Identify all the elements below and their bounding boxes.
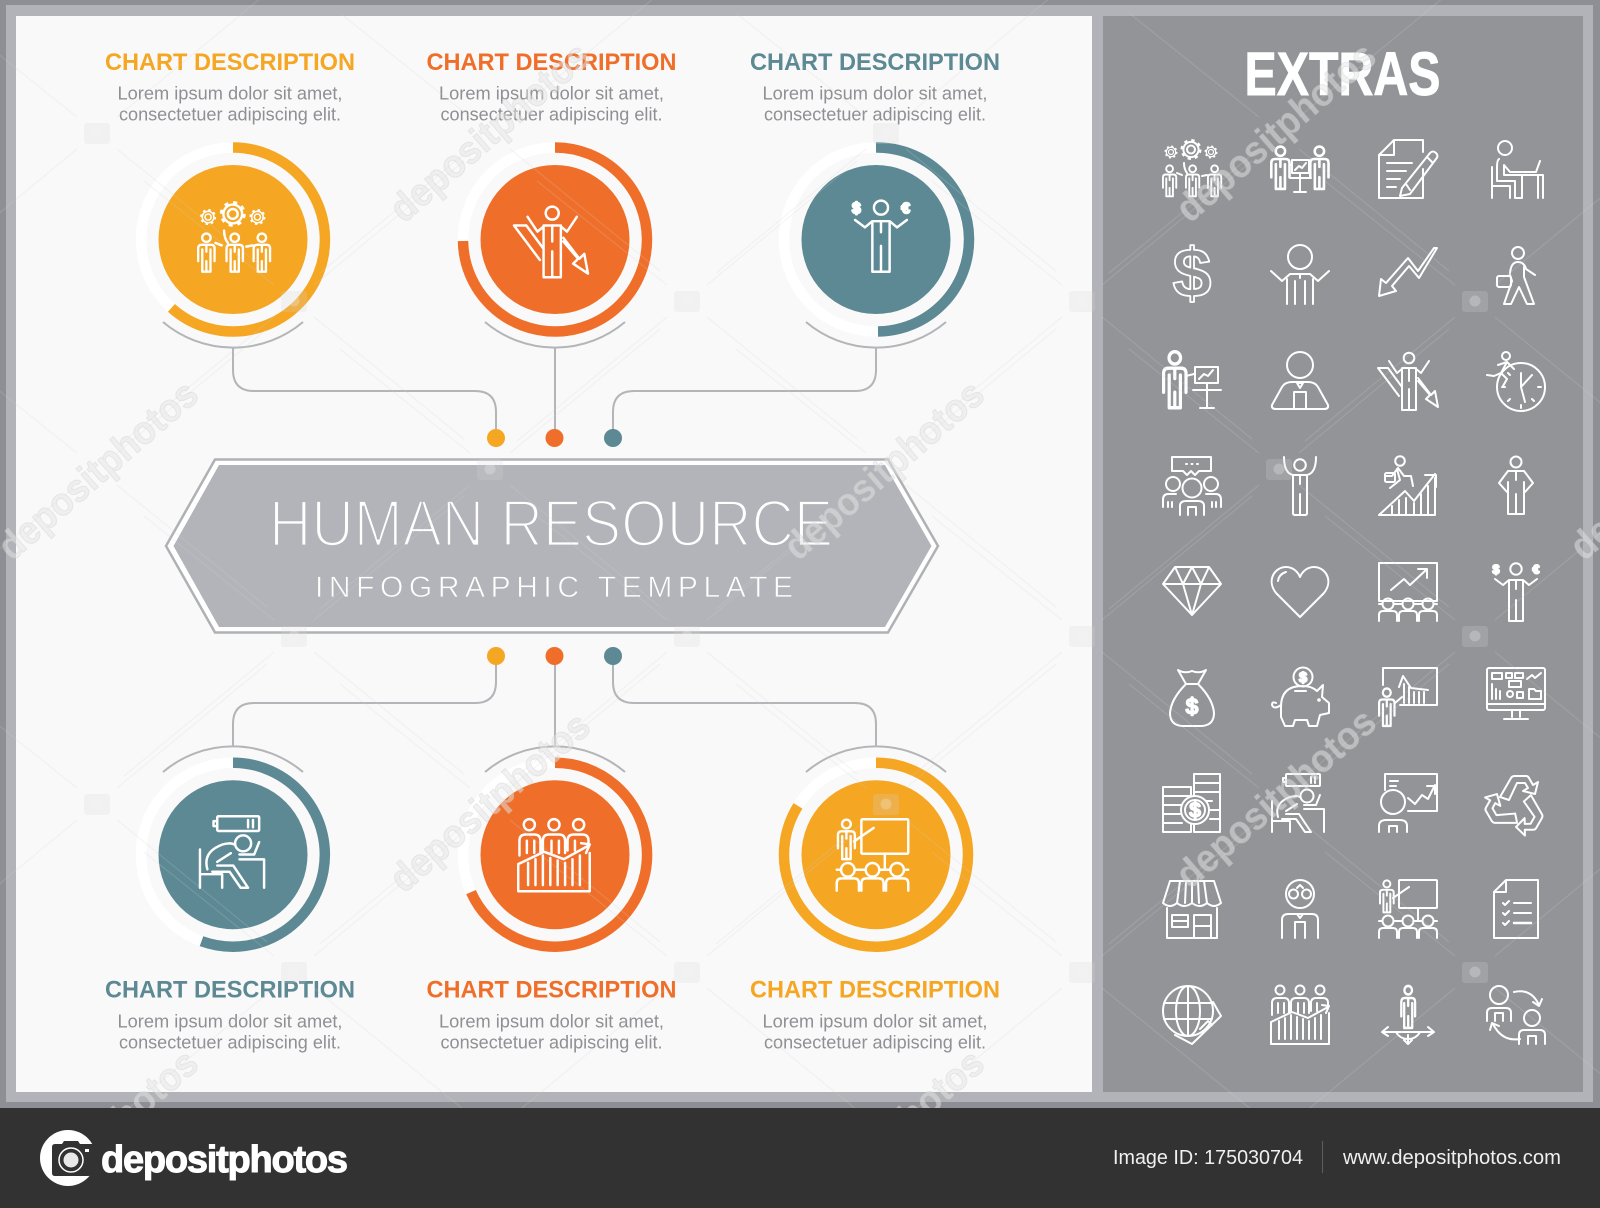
subtitle: INFOGRAPHIC TEMPLATE bbox=[315, 571, 793, 604]
icon: board with audience bbox=[1379, 563, 1437, 621]
icon: falling man bbox=[514, 207, 588, 277]
column 1 heading and text: CHART DESCRIPTION bbox=[105, 49, 355, 76]
icon: diamond bbox=[1163, 567, 1221, 615]
dots above banner bbox=[487, 429, 622, 447]
dots below banner bbox=[487, 647, 622, 665]
icon: worker at desk bbox=[1492, 141, 1543, 198]
icon: dollar sign bbox=[1173, 234, 1211, 312]
column 4 heading and text bbox=[105, 976, 355, 1052]
watermark overlay: depositphotos bbox=[1168, 34, 1385, 231]
column 6 heading and text: CHART DESCRIPTION bbox=[750, 976, 1000, 1004]
icon: group with speech bubble bbox=[1163, 457, 1221, 515]
logo wordmark: depositphotos bbox=[101, 1139, 348, 1181]
chart: circle 3 currency man bbox=[784, 147, 969, 332]
watermark overlay: depositphotos bbox=[1168, 700, 1385, 897]
column 1 heading and text: Lorem ipsum dolor sit amet, bbox=[118, 84, 342, 104]
chart: circle 2 falling man bbox=[463, 148, 647, 332]
icon: recycling arrows bbox=[1480, 776, 1549, 839]
footer bar bbox=[0, 1108, 1600, 1208]
icon: store bbox=[1163, 881, 1221, 938]
watermark overlay: depositphotos bbox=[382, 34, 599, 231]
icon: presenter and audience bbox=[837, 819, 908, 891]
column 4 heading and text: CHART DESCRIPTION bbox=[105, 976, 355, 1004]
icon: team with gears bbox=[198, 203, 270, 272]
column 6 heading and text bbox=[750, 976, 1000, 1052]
icon: man with raised arms bbox=[1284, 457, 1316, 515]
icon: team with bars bbox=[518, 819, 590, 891]
column 2 heading and text bbox=[426, 49, 676, 124]
icon grid bbox=[1163, 140, 1549, 1044]
icon: team with bars bbox=[1271, 986, 1329, 1044]
column 5 heading and text: Lorem ipsum dolor sit amet, bbox=[439, 1012, 664, 1032]
title: HUMAN RESOURCE bbox=[269, 486, 833, 560]
icon: man with hands on hips bbox=[1499, 456, 1533, 514]
icon: coin stacks bbox=[1163, 774, 1220, 832]
panel: infographic bbox=[16, 16, 1092, 1092]
icon: document and pencil bbox=[1379, 140, 1438, 198]
icon: runner and clock bbox=[1487, 352, 1545, 411]
column 5 heading and text: consectetuer adipiscing elit. bbox=[440, 1032, 662, 1052]
banner bbox=[166, 460, 938, 632]
column 6 heading and text: consectetuer adipiscing elit. bbox=[764, 1032, 986, 1052]
column 3 heading and text bbox=[750, 49, 1000, 124]
icon: man with dollar and euro bbox=[1493, 562, 1540, 621]
icon: walking businessman bbox=[1497, 247, 1535, 304]
column 3 heading and text: CHART DESCRIPTION bbox=[750, 49, 1000, 76]
icon: meeting with monitor bbox=[1271, 147, 1328, 192]
column 3 heading and text: consectetuer adipiscing elit. bbox=[764, 104, 986, 124]
watermark overlay: depositphotos bbox=[382, 704, 599, 901]
watermark overlay: depositphotos bbox=[776, 372, 993, 569]
column 6 heading and text: Lorem ipsum dolor sit amet, bbox=[762, 1012, 988, 1032]
column 4 heading and text: Lorem ipsum dolor sit amet, bbox=[118, 1012, 342, 1032]
icon: man with dollar and euro bbox=[852, 201, 911, 272]
column 4 heading and text: consectetuer adipiscing elit. bbox=[119, 1032, 341, 1052]
column 2 heading and text: Lorem ipsum dolor sit amet, bbox=[439, 84, 664, 104]
image id: Image ID: 175030704 bbox=[1113, 1147, 1303, 1169]
icon: presenter with screen bbox=[1164, 352, 1221, 408]
icon: money bag bbox=[1170, 670, 1214, 726]
chart: circle 5 team bars bbox=[463, 763, 647, 947]
logo: camera badge bbox=[40, 1130, 96, 1186]
icon: monitor dashboard bbox=[1487, 668, 1545, 719]
column 5 heading and text: CHART DESCRIPTION bbox=[426, 976, 676, 1004]
icon: swapping people bbox=[1487, 986, 1545, 1044]
icon: tired worker bbox=[1272, 774, 1324, 832]
chart: circle 6 presentation bbox=[784, 763, 968, 947]
icon: presenter with chart bbox=[1379, 668, 1437, 726]
icon: checklist bbox=[1494, 880, 1538, 938]
column 3 heading and text: Lorem ipsum dolor sit amet, bbox=[762, 84, 988, 104]
website url: www.depositphotos.com bbox=[1342, 1147, 1561, 1169]
column 2 heading and text: CHART DESCRIPTION bbox=[426, 49, 676, 76]
icon: person with glasses bbox=[1282, 880, 1318, 938]
column 1 heading and text bbox=[105, 49, 355, 124]
column 1 heading and text: consectetuer adipiscing elit. bbox=[119, 104, 341, 124]
icon: piggy bank bbox=[1272, 668, 1329, 726]
icon: presenter and audience bbox=[1379, 880, 1437, 938]
icon: heart bbox=[1272, 567, 1328, 617]
column 5 heading and text bbox=[426, 976, 676, 1052]
panel: extras bbox=[1103, 16, 1583, 1092]
icon: team with gears bbox=[1163, 140, 1221, 196]
icon: person bust bbox=[1272, 352, 1328, 409]
connectors bbox=[163, 322, 946, 772]
chart: circle 4 tired worker bbox=[141, 763, 325, 947]
icon: globe bbox=[1163, 986, 1221, 1044]
icon: shrugging man bbox=[1271, 245, 1329, 304]
chart: circle 1 team gears bbox=[141, 148, 325, 332]
icon: tired worker bbox=[200, 816, 264, 888]
icon: man with direction arrows bbox=[1382, 986, 1434, 1044]
icon: bust with chart bbox=[1379, 774, 1437, 832]
column 2 heading and text: consectetuer adipiscing elit. bbox=[440, 104, 662, 124]
icon: falling arrow bbox=[1379, 248, 1437, 296]
extras heading: EXTRAS bbox=[1244, 40, 1440, 108]
icon: falling man bbox=[1378, 353, 1438, 410]
icon: climbing growth chart bbox=[1379, 456, 1436, 515]
